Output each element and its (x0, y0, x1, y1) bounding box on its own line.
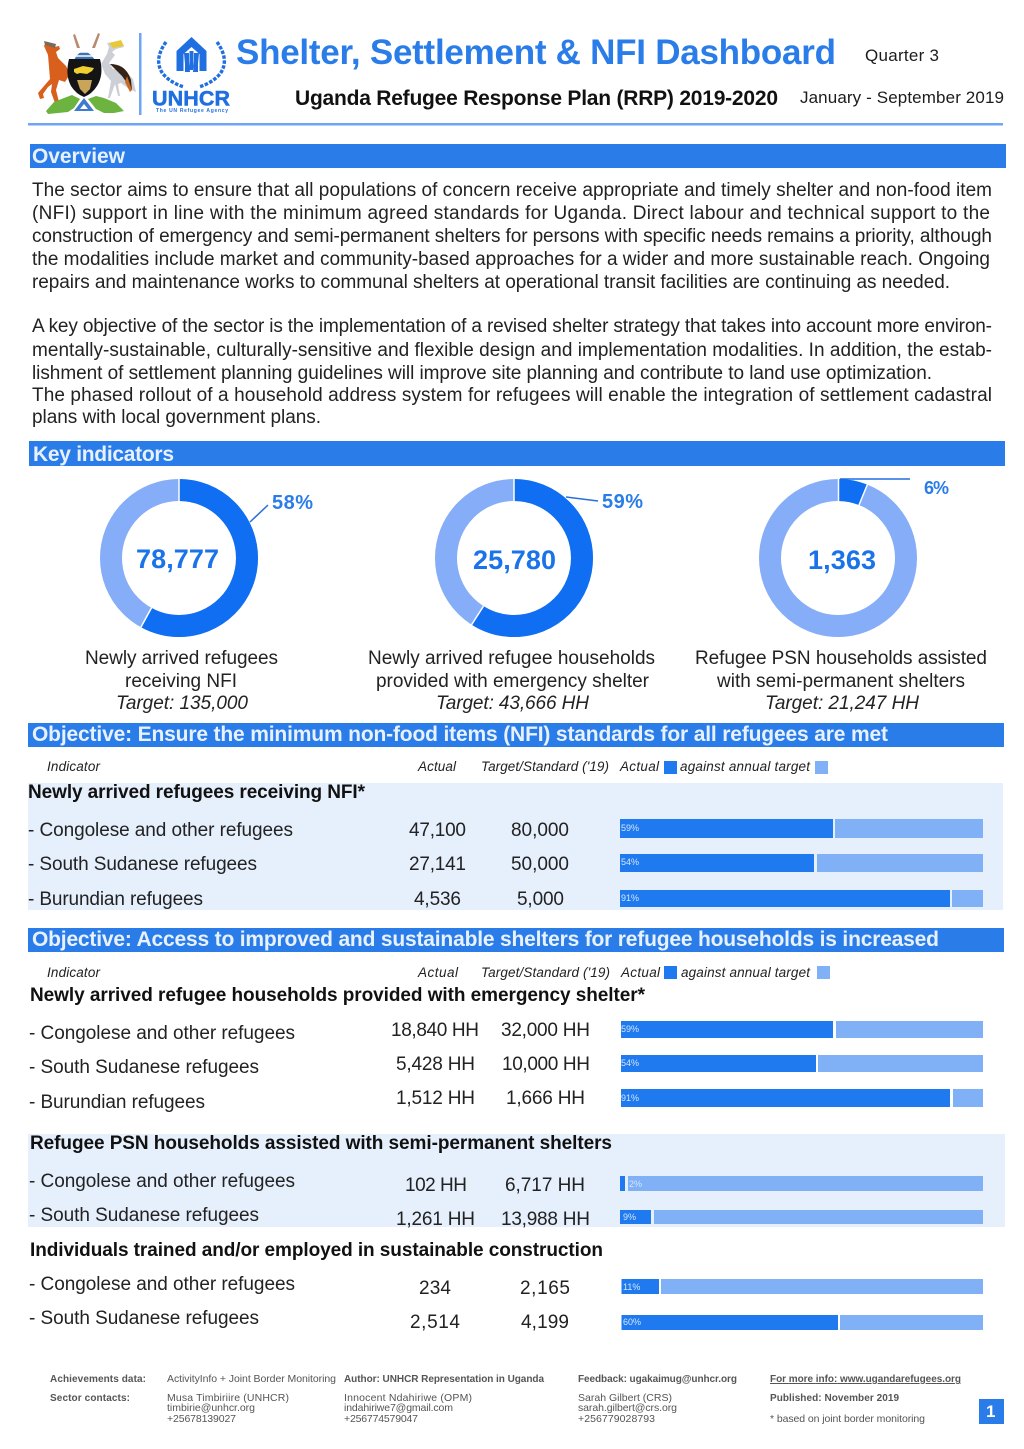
donut chart: emergency shelter 59% (446, 478, 643, 626)
panel: objective NFI (28, 723, 1004, 910)
table header with legend: against annual target (680, 759, 811, 774)
row: South Sudanese (29, 1054, 983, 1078)
contact: CRS: +256779028793 (578, 1413, 655, 1425)
row: South Sudanese: 27,141 (409, 854, 466, 875)
overview text block: lishment of settlement planning guidelines will improve site planning and contribute to land use optimization. (32, 363, 932, 384)
caption: semi-permanent shelters: Refugee PSN households assisted (695, 648, 987, 669)
icon: Uganda coat of arms (38, 33, 136, 114)
contact: CRS: sarah.gilbert@crs.org (578, 1402, 677, 1414)
contact: OPM: Innocent Ndahiriwe (OPM) (344, 1392, 472, 1404)
overview text block: A key objective of the sector is the implementation of a revised shelter strategy that takes into account more environ- (32, 316, 992, 337)
divider line (139, 33, 142, 115)
row: Congolese trained: 234 (419, 1278, 451, 1299)
caption: NFI (85, 648, 278, 714)
donut chart: semi-permanent shelters 6%: 1,363 (808, 545, 876, 575)
achievements data source (50, 1373, 336, 1385)
achievements data source: ActivityInfo + Joint Border Monitoring (167, 1373, 336, 1385)
feedback: Feedback: ugakaimug@unhcr.org (578, 1374, 737, 1385)
row: Congolese trained: 2,165 (520, 1278, 570, 1299)
donut chart: semi-permanent shelters 6% (770, 478, 949, 626)
contact: OPM: indahiriwe7@gmail.com (344, 1402, 453, 1414)
title: Shelter, Settlement & NFI Dashboard (236, 33, 836, 72)
caption: emergency shelter: Target: 43,666 HH (436, 693, 589, 714)
row: South Sudanese PSN: 13,988 HH (501, 1209, 590, 1230)
table header with legend: Actual (619, 759, 660, 774)
contact: OPM: +256774579047 (344, 1413, 418, 1425)
table header with legend: Target/Standard ('19) (481, 965, 610, 980)
panel: overview (30, 144, 1006, 428)
contact: UNHCR (167, 1392, 289, 1425)
row: Burundian (28, 889, 983, 910)
donut chart: NFI 58%: 58% (272, 492, 313, 514)
objective heading: Objective: Access to improved and sustainable shelters for refugee households is increased (32, 928, 939, 951)
subheading: Newly arrived refugees receiving NFI* (28, 782, 366, 803)
row: Congolese PSN: 102 HH (405, 1175, 467, 1196)
donut chart: NFI 58% (111, 478, 313, 628)
objective heading: Objective: Ensure the minimum non-food items (NFI) standards for all refugees are met (32, 723, 888, 746)
row: Congolese: 80,000 (511, 820, 569, 841)
row: Congolese: 47,100 (409, 820, 466, 841)
row: South Sudanese: 10,000 HH (502, 1054, 590, 1075)
overview text block: mentally-sustainable, culturally-sensitive and flexible design and implementation modalities. In addition, the estab- (32, 340, 992, 361)
row: Congolese: 59% (621, 823, 639, 833)
caption: semi-permanent shelters: with semi-permanent shelters (716, 671, 965, 692)
footer (50, 1373, 1004, 1425)
row: South Sudanese trained: 60% (623, 1317, 641, 1327)
caption: NFI: Target: 135,000 (116, 693, 248, 714)
overview text block: (NFI) support in line with the minimum agreed standards for Uganda. Direct labour and technical support to the (32, 203, 990, 224)
table header with legend: Actual (417, 759, 457, 774)
row: South Sudanese: 54% (621, 857, 639, 867)
row: South Sudanese PSN: 1,261 HH (396, 1209, 475, 1230)
row: Congolese: - Congolese and other refugees (28, 820, 293, 841)
row: South Sudanese PSN: - South Sudanese refugees (29, 1205, 259, 1226)
row: Congolese trained (29, 1274, 983, 1299)
row: Burundian: 1,666 HH (506, 1088, 585, 1109)
row: Congolese PSN: 2% (629, 1179, 642, 1189)
contact: OPM (344, 1392, 472, 1425)
logo: UNHCR: UNHCR (152, 86, 230, 110)
caption: semi-permanent shelters (695, 648, 987, 714)
overview text block: construction of emergency and semi-permanent shelters for persons with specific needs remains a priority, although (32, 226, 992, 247)
overview heading: Overview (32, 145, 126, 168)
contact: UNHCR: Musa Timbiriire (UNHCR) (167, 1392, 289, 1404)
row: Congolese (29, 1020, 983, 1044)
row: Burundian: - Burundian refugees (28, 889, 203, 910)
table header with legend: Target/Standard ('19) (481, 759, 609, 774)
quarter: Quarter 3 (865, 46, 939, 65)
caption: emergency shelter: Newly arrived refugee households (368, 648, 655, 669)
subtitle: Uganda Refugee Response Plan (RRP) 2019-2020 (295, 87, 778, 110)
subheading: trained: Individuals trained and/or employed in sustainable construction (30, 1240, 603, 1261)
row: Congolese (28, 819, 983, 841)
row: Congolese trained: 11% (623, 1282, 640, 1292)
row: Congolese PSN: - Congolese and other refugees (29, 1171, 295, 1192)
row: South Sudanese PSN: 9% (623, 1212, 636, 1222)
row: South Sudanese: 5,428 HH (396, 1054, 475, 1075)
overview text block (32, 180, 992, 428)
row: Burundian: 1,512 HH (396, 1088, 475, 1109)
table header with legend (47, 965, 830, 980)
caption: emergency shelter: provided with emergency shelter (376, 671, 650, 692)
row: Burundian: 91% (621, 1093, 639, 1103)
overview text block: The phased rollout of a household address system for refugees will enable the integration of settlement cadastral (32, 385, 992, 406)
overview text block: The sector aims to ensure that all populations of concern receive appropriate and timely shelter and non-food item (32, 180, 992, 201)
caption: semi-permanent shelters: Target: 21,247 HH (765, 693, 919, 714)
panel: key indicators (29, 441, 1005, 714)
row: South Sudanese: - South Sudanese refugees (29, 1057, 259, 1078)
row: South Sudanese: 54% (621, 1058, 639, 1068)
subheading: PSN: Refugee PSN households assisted with semi-permanent shelters (30, 1133, 612, 1154)
row: Congolese: 18,840 HH (391, 1020, 479, 1041)
table header with legend: against annual target (681, 965, 811, 980)
donut chart: emergency shelter 59%: 25,780 (473, 545, 556, 575)
row: South Sudanese trained: 2,514 (410, 1312, 460, 1333)
author: Author: UNHCR Representation in Uganda (344, 1374, 544, 1385)
overview text block: plans with local government plans. (32, 407, 321, 428)
donut chart: semi-permanent shelters 6%: 6% (924, 478, 949, 498)
key indicators heading: Key indicators (33, 443, 174, 466)
caption: emergency shelter (368, 648, 655, 714)
overview text block: repairs and maintenance works to communal shelters at operational transit facilities are continuing as needed. (32, 272, 950, 293)
row: South Sudanese: 50,000 (511, 854, 569, 875)
contact: UNHCR: +25678139027 (167, 1413, 236, 1425)
row: Congolese: 59% (621, 1024, 639, 1034)
table header with legend: Actual (417, 965, 459, 980)
logo: UNHCR: The UN Refugee Agency (156, 108, 228, 114)
logo: UNHCR (152, 37, 230, 114)
donut chart: NFI 58%: 78,777 (136, 544, 219, 574)
published and note: Published: November 2019 (770, 1393, 899, 1404)
key indicators heading (29, 441, 1005, 466)
achievements data source: Achievements data: (50, 1374, 146, 1385)
caption: NFI: Newly arrived refugees (85, 648, 278, 669)
row: Congolese trained: - Congolese and other refugees (29, 1274, 295, 1295)
row: South Sudanese (28, 854, 983, 875)
contact: CRS (578, 1392, 677, 1425)
row: Burundian (29, 1088, 983, 1113)
row: South Sudanese trained: 4,199 (521, 1312, 569, 1333)
published and note (770, 1393, 925, 1425)
more info: For more info: www.ugandarefugees.org (770, 1374, 961, 1385)
table header with legend (47, 759, 828, 774)
page number: 1 (986, 1402, 995, 1421)
row: South Sudanese trained: - South Sudanese refugees (29, 1308, 259, 1329)
PSN table background (28, 1134, 1005, 1227)
row: Congolese PSN (29, 1171, 983, 1196)
row: South Sudanese trained (29, 1308, 983, 1333)
subheading: emergency shelter: Newly arrived refugee households provided with emergency shelter* (30, 985, 646, 1006)
row: Burundian: 4,536 (414, 889, 461, 910)
NFI table background (28, 783, 1003, 910)
donut chart: emergency shelter 59%: 59% (602, 491, 643, 513)
caption: NFI: receiving NFI (125, 671, 237, 692)
overview heading (30, 144, 1006, 168)
row: Congolese: 32,000 HH (501, 1020, 590, 1041)
page number (979, 1399, 1004, 1424)
overview text block: the modalities include market and community-based approaches for a wider and more sustainable reach. Ongoing (32, 249, 990, 270)
table header with legend: Actual (620, 965, 661, 980)
row: Burundian: - Burundian refugees (29, 1092, 205, 1113)
panel: objective shelters (28, 928, 1005, 1333)
row: South Sudanese: - South Sudanese refugees (28, 854, 257, 875)
header (28, 33, 1004, 126)
row: Congolese: - Congolese and other refugees (29, 1023, 295, 1044)
published and note: * based on joint border monitoring (770, 1413, 925, 1425)
row: Burundian: 91% (621, 893, 639, 903)
row: Congolese PSN: 6,717 HH (505, 1175, 585, 1196)
row: Burundian: 5,000 (517, 889, 564, 910)
contact: CRS: Sarah Gilbert (CRS) (578, 1392, 672, 1404)
table header with legend: Indicator (47, 759, 100, 774)
table header with legend: Indicator (47, 965, 100, 980)
date range: January - September 2019 (800, 88, 1004, 107)
row: South Sudanese PSN (29, 1205, 983, 1230)
header rule (28, 123, 1003, 126)
contact: UNHCR: timbirie@unhcr.org (167, 1402, 255, 1414)
sector contacts label: Sector contacts: (50, 1393, 130, 1404)
